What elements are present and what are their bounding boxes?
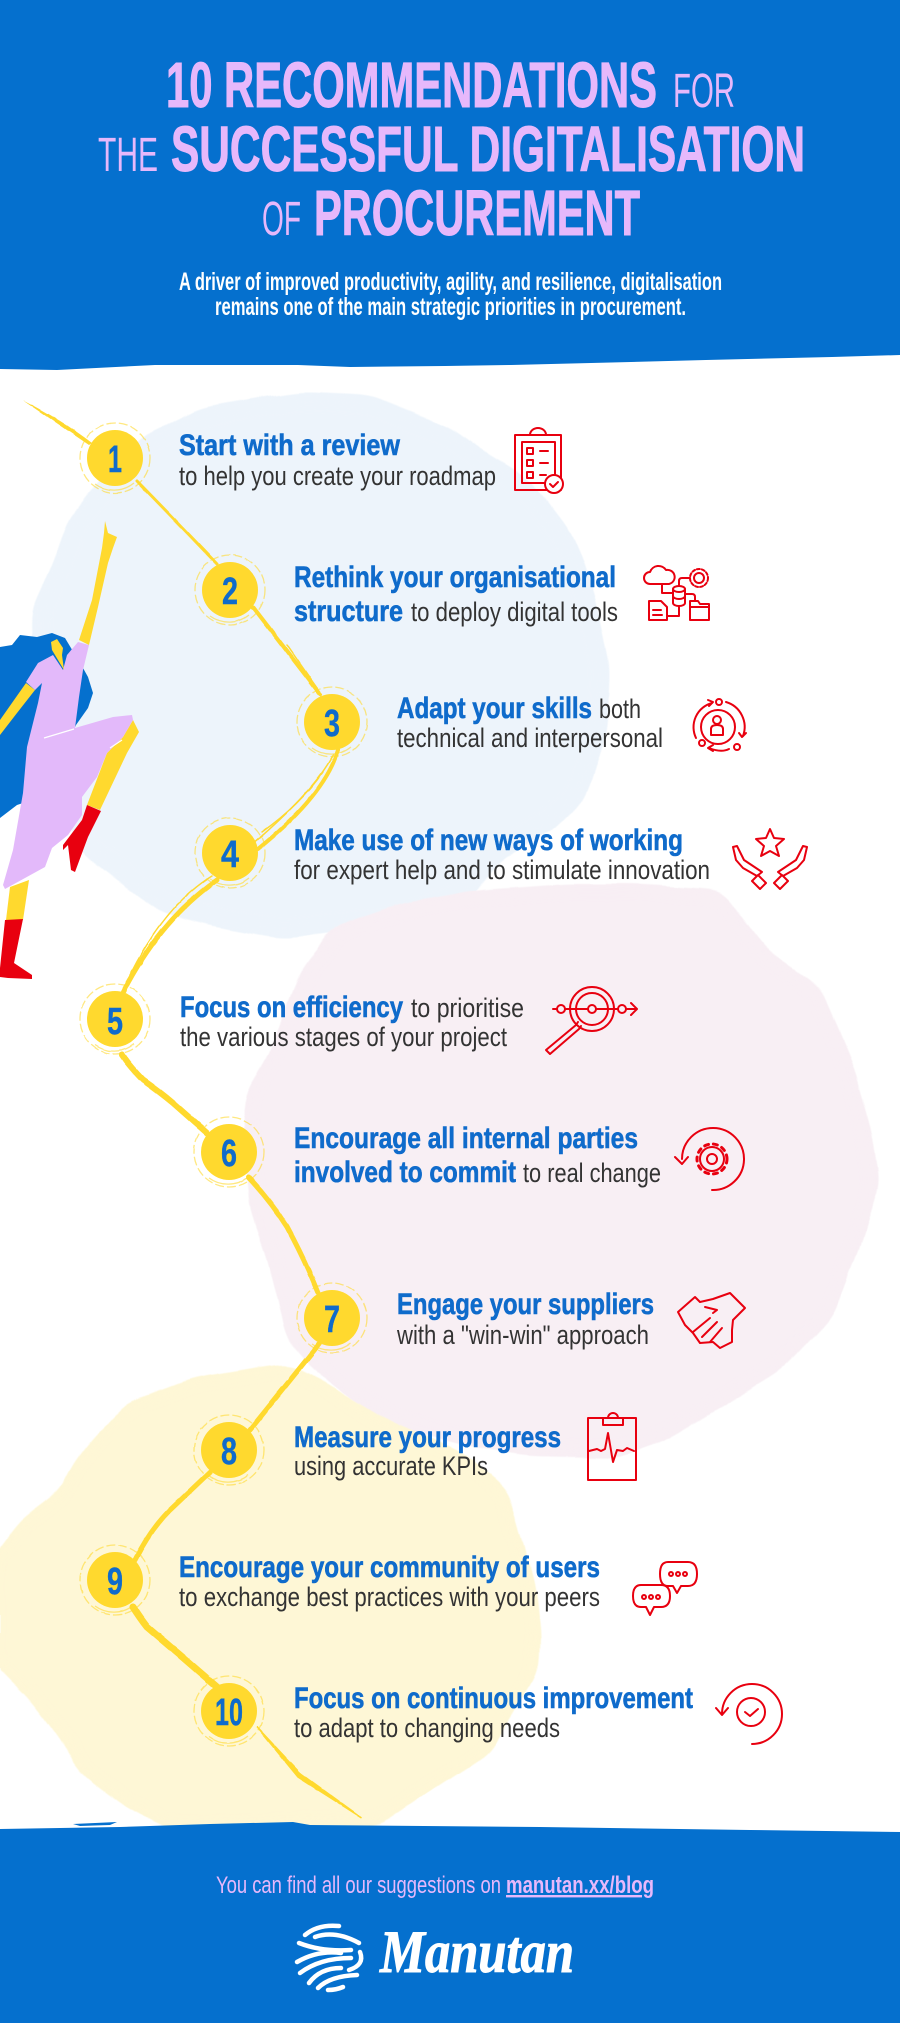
raised arm — [79, 521, 117, 645]
step 10 — [194, 1676, 782, 1746]
step 8 — [194, 1413, 636, 1485]
icon: hands and star — [733, 829, 807, 889]
head — [51, 639, 64, 670]
footer link text: manutan.xx/blog — [506, 1872, 654, 1899]
icon: speech bubbles — [633, 1562, 697, 1615]
text: step 8: Measure your progress — [294, 1421, 561, 1454]
text: step 3: technical and interpersonal — [397, 723, 663, 753]
text: step 2: Rethink your organisational — [294, 561, 616, 594]
step 2 — [195, 555, 709, 628]
illustration: woman pointing at step one — [0, 521, 139, 979]
icon: cloud, database, documents — [644, 566, 709, 620]
dress — [3, 642, 133, 889]
text: step 5: the various stages of your project — [180, 1022, 507, 1052]
title: OF — [262, 193, 301, 246]
number badge 5: 5 — [107, 1001, 123, 1043]
raised leg — [87, 720, 139, 810]
text: step 10: to adapt to changing needs — [294, 1713, 560, 1743]
icon: clipboard with heart rate — [588, 1413, 636, 1480]
number badge 3 — [297, 687, 367, 757]
text: step 1: Start with a review — [179, 429, 401, 462]
number badge 9 — [80, 1545, 150, 1615]
footer link text: You can find all our suggestions on — [216, 1872, 501, 1899]
number badge 4 — [195, 818, 265, 888]
yellow path linking the ten steps — [23, 400, 362, 1818]
header band — [0, 0, 900, 370]
step 6 — [194, 1117, 744, 1190]
text: step 4 — [294, 824, 710, 885]
text: step 8 — [294, 1421, 561, 1481]
number badge 5 — [80, 984, 150, 1054]
text: step 7: with a "win-win" approach — [396, 1320, 649, 1350]
number badge 6 — [194, 1117, 264, 1187]
title — [98, 49, 805, 249]
number badge 6: 6 — [221, 1133, 237, 1175]
step 9 — [80, 1545, 697, 1615]
logo wordmark: Manutan — [379, 1919, 574, 1985]
icon: continuous improvement cycle — [716, 1684, 782, 1744]
dress fold highlight — [44, 729, 122, 748]
text: step 7 — [396, 1288, 654, 1350]
text: step 3: Adapt your skills — [397, 692, 592, 725]
title: THE — [98, 129, 158, 182]
footer band — [0, 1822, 900, 2023]
icon: magnifier on process line — [546, 987, 637, 1054]
text: step 10 — [294, 1682, 693, 1743]
text: step 7: Engage your suppliers — [397, 1288, 654, 1321]
icon: gear with circular arrow — [675, 1128, 744, 1190]
number badge 8 — [194, 1415, 264, 1485]
text: step 2: structure — [294, 595, 403, 628]
text: step 4: Make use of new ways of working — [294, 824, 683, 857]
number badge 7 — [297, 1283, 367, 1353]
text: step 3: both — [599, 694, 641, 724]
text: step 1: to help you create your roadmap — [179, 461, 496, 491]
lower boot — [0, 919, 32, 979]
text: step 5: to prioritise — [411, 993, 524, 1023]
text: step 2: to deploy digital tools — [411, 597, 618, 627]
number badge 1: 1 — [108, 439, 122, 481]
text: step 4: for expert help and to stimulate innovation — [294, 855, 710, 885]
step 4 — [195, 818, 807, 889]
step 7 — [297, 1283, 745, 1353]
text: step 5 — [180, 991, 524, 1052]
number badge 10: 10 — [215, 1692, 243, 1734]
icon: person in cycle — [694, 699, 746, 751]
hair — [0, 633, 93, 818]
number badge 7: 7 — [324, 1299, 340, 1341]
number badge 2 — [195, 555, 265, 625]
subtitle — [179, 268, 722, 321]
icon: checklist clipboard — [515, 428, 563, 493]
step 5 — [80, 984, 637, 1054]
text: step 5: Focus on efficiency — [180, 991, 403, 1024]
text: step 3 — [397, 692, 663, 753]
watercolour blob: pink — [242, 884, 880, 1457]
step 3 — [297, 687, 746, 757]
text: step 9 — [179, 1551, 600, 1612]
number badge 8: 8 — [221, 1431, 237, 1473]
logo: Manutan — [297, 1919, 574, 1990]
number badge 4: 4 — [221, 834, 239, 876]
watercolour blob: yellow — [0, 1363, 540, 1830]
number badge 2: 2 — [222, 571, 238, 613]
title: 10 RECOMMENDATIONS — [166, 49, 657, 121]
text: step 2 — [294, 561, 618, 628]
icon: handshake — [678, 1293, 745, 1348]
step 1 — [80, 423, 563, 493]
lower leg — [6, 880, 29, 920]
title: PROCUREMENT — [314, 177, 640, 249]
text: step 8: using accurate KPIs — [294, 1451, 488, 1481]
text: step 10: Focus on continuous improvement — [294, 1682, 693, 1715]
number badge 9: 9 — [107, 1561, 123, 1603]
text: step 6: to real change — [523, 1158, 661, 1188]
logo mark — [297, 1926, 361, 1990]
number badge 10 — [194, 1676, 264, 1746]
text: step 6 — [294, 1122, 661, 1189]
number badge 3: 3 — [324, 703, 340, 745]
text: step 9: Encourage your community of users — [179, 1551, 600, 1584]
text: step 9: to exchange best practices with your peers — [179, 1582, 600, 1612]
number badge 1 — [80, 423, 150, 493]
text: step 1 — [179, 429, 496, 491]
text: step 6: involved to commit — [294, 1156, 516, 1189]
watercolour blob: blue — [32, 392, 610, 939]
lowered arm — [0, 683, 35, 735]
text: step 6: Encourage all internal parties — [294, 1122, 638, 1155]
title: FOR — [673, 65, 735, 118]
raised boot — [63, 805, 101, 872]
